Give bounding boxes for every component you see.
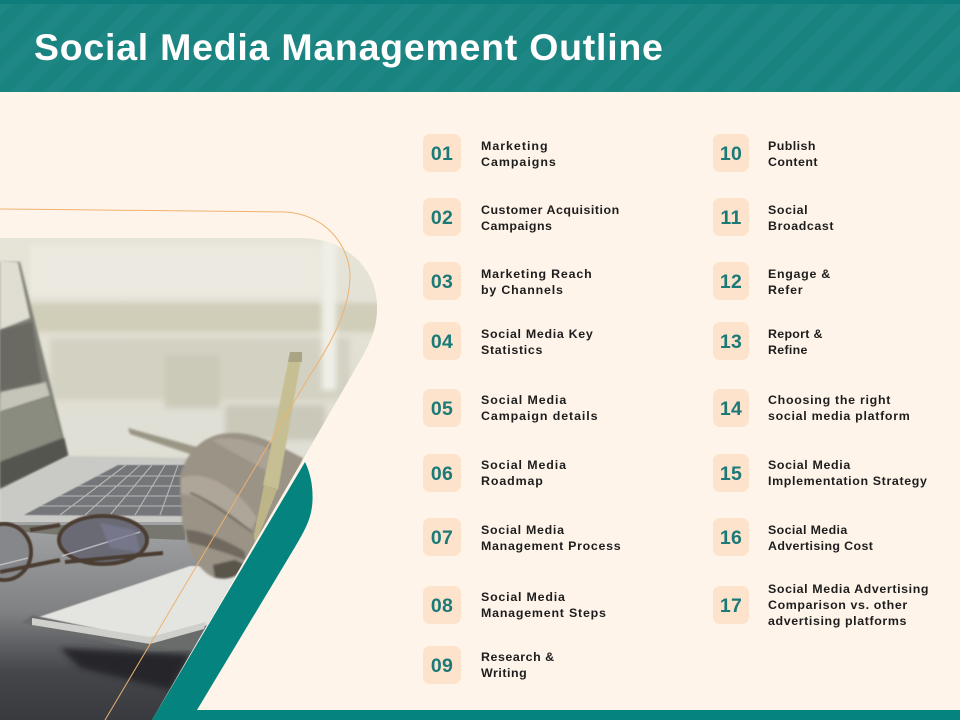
item 07: Social Media xyxy=(481,523,565,537)
item 02: Campaigns xyxy=(481,219,552,233)
item 06 xyxy=(423,454,567,492)
item 10: Content xyxy=(768,155,818,169)
item 17 xyxy=(713,582,929,628)
item 11: Social xyxy=(768,203,808,217)
pencil xyxy=(263,353,302,490)
item 12: Engage & xyxy=(768,267,831,281)
item 09: Writing xyxy=(481,666,527,680)
item 01: Campaigns xyxy=(481,155,557,169)
item 13: Refine xyxy=(768,343,808,357)
item 17: Social Media Advertising xyxy=(768,582,929,596)
item 07: Management Process xyxy=(481,539,621,553)
item 10: 10 xyxy=(720,143,742,165)
item 14 xyxy=(713,389,911,427)
item 09 xyxy=(423,646,555,684)
glasses xyxy=(0,516,163,580)
item 12: 12 xyxy=(720,271,742,293)
item 08 xyxy=(423,586,607,624)
teal accent shape xyxy=(152,462,313,720)
hand xyxy=(180,433,303,578)
item 06: Social Media xyxy=(481,458,567,472)
photo panel with teal accent and orange line xyxy=(0,208,377,720)
item 03 xyxy=(423,262,592,300)
header band xyxy=(0,0,960,92)
item 08: 08 xyxy=(431,595,453,617)
item 11: Broadcast xyxy=(768,219,834,233)
item 17: Comparison vs. other xyxy=(768,598,908,612)
title: Social Media Management Outline xyxy=(34,26,664,68)
item 06: 06 xyxy=(431,463,453,485)
item 05 xyxy=(423,389,598,427)
laptop screen xyxy=(0,262,68,490)
item 06: Roadmap xyxy=(481,474,544,488)
item 13 xyxy=(713,322,823,360)
item 12 xyxy=(713,262,831,300)
item 15: Implementation Strategy xyxy=(768,474,928,488)
item 10: Publish xyxy=(768,139,816,153)
item 15: Social Media xyxy=(768,458,851,472)
item 04: Statistics xyxy=(481,343,543,357)
item 17: advertising platforms xyxy=(768,614,907,628)
item 05: Campaign details xyxy=(481,409,598,423)
item 14: 14 xyxy=(720,398,742,420)
orange curved line xyxy=(0,209,350,720)
item 13: 13 xyxy=(720,331,742,353)
item 09: Research & xyxy=(481,650,555,664)
item 07: 07 xyxy=(431,527,453,549)
item 16: 16 xyxy=(720,527,742,549)
item 14: Choosing the right xyxy=(768,393,891,407)
pen behind hand xyxy=(128,428,200,456)
item 11: 11 xyxy=(720,207,742,229)
item 04: Social Media Key xyxy=(481,327,593,341)
item 01: 01 xyxy=(431,143,453,165)
item 15: 15 xyxy=(720,463,742,485)
item 15 xyxy=(713,454,928,492)
item 02: 02 xyxy=(431,207,453,229)
item 08: Management Steps xyxy=(481,606,607,620)
item 04: 04 xyxy=(431,331,453,353)
table xyxy=(0,522,240,720)
item 16: Social Media xyxy=(768,523,848,537)
footer band xyxy=(197,710,960,720)
laptop base xyxy=(0,455,187,522)
item 10 xyxy=(713,134,818,172)
item 05: Social Media xyxy=(481,393,567,407)
item 07 xyxy=(423,518,621,556)
item 03: by Channels xyxy=(481,283,564,297)
item 13: Report & xyxy=(768,327,823,341)
photo: desk scene xyxy=(0,238,400,720)
item 16: Advertising Cost xyxy=(768,539,873,553)
item 17: 17 xyxy=(720,595,742,617)
item 01 xyxy=(423,134,557,172)
item 14: social media platform xyxy=(768,409,911,423)
item 12: Refer xyxy=(768,283,803,297)
item 02: Customer Acquisition xyxy=(481,203,620,217)
item 04 xyxy=(423,322,593,360)
item 09: 09 xyxy=(431,655,453,677)
item 05: 05 xyxy=(431,398,453,420)
item 16 xyxy=(713,518,873,556)
item 02 xyxy=(423,198,620,236)
notebook xyxy=(30,566,240,648)
item 11 xyxy=(713,198,834,236)
item 03: Marketing Reach xyxy=(481,267,592,281)
item 01: Marketing xyxy=(481,139,549,153)
item 08: Social Media xyxy=(481,590,566,604)
item 03: 03 xyxy=(431,271,453,293)
